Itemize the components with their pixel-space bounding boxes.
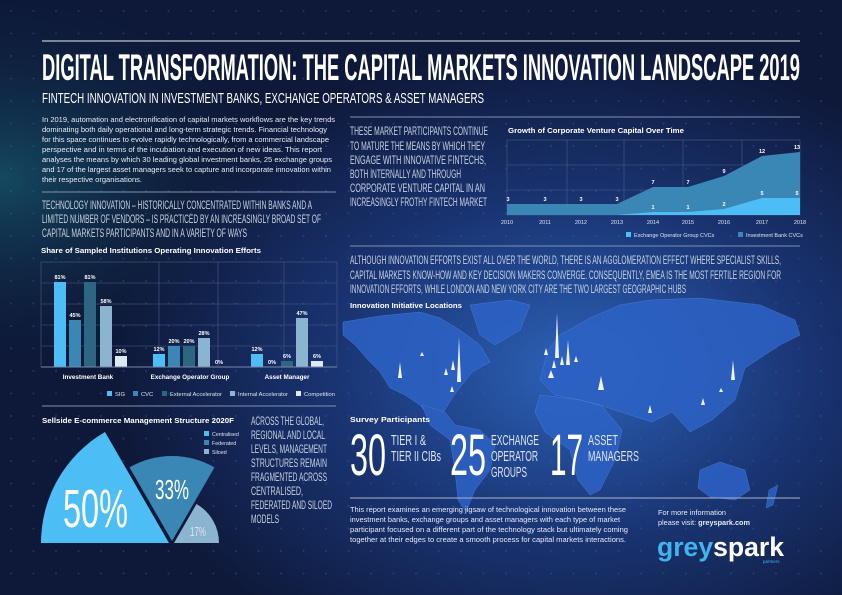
- area chart: growth of corporate venture capital: 2017: [756, 220, 768, 226]
- management structure statement: FRAGMENTED ACROSS: [251, 470, 327, 484]
- closing paragraph: together at their edges to create a smooth process for capital markets interactions.: [350, 535, 626, 544]
- survey participants: TIER I &: [391, 432, 426, 449]
- bar chart: share of sampled institutions: Exchange Operator Group: [151, 374, 230, 381]
- polar chart: sellside e-commerce management structure: 17%: [190, 524, 206, 539]
- survey participants: Survey Participants: [350, 415, 430, 424]
- market participants statement: THESE MARKET PARTICIPANTS CONTINUE: [350, 124, 488, 138]
- survey participants: [350, 415, 639, 488]
- intro paragraph: dominating both daily operational and long-term strategic trends. Financial technology: [42, 125, 327, 134]
- intro paragraph: analyses the means by which 30 leading global investment banks, 25 exchange groups: [42, 155, 332, 164]
- area chart: growth of corporate venture capital: 2010: [501, 220, 513, 226]
- polar chart: sellside e-commerce management structure: 50%: [63, 479, 128, 539]
- bar chart: share of sampled institutions: SIG: [115, 392, 125, 398]
- area chart: growth of corporate venture capital: 7: [651, 180, 655, 186]
- bar chart: share of sampled institutions: Internal Accelerator: [238, 392, 288, 398]
- bar chart: share of sampled institutions: Asset Manager: [265, 374, 310, 381]
- bar chart: share of sampled institutions: Investment Bank: [63, 374, 114, 381]
- area chart: growth of corporate venture capital: 3: [506, 197, 510, 203]
- intro paragraph: and 17 of the largest asset managers seek to capture and incorporate innovation within: [42, 165, 331, 174]
- market participants statement: CORPORATE VENTURE CAPITAL IN AN: [350, 181, 485, 195]
- bar chart: share of sampled institutions: 81%: [54, 275, 66, 281]
- closing paragraph: This report examines an emerging jigsaw of technological innovation between these: [350, 505, 626, 514]
- management structure statement: STRUCTURES REMAIN: [251, 456, 327, 470]
- intro paragraph: their respective organisations.: [42, 175, 142, 184]
- area chart: growth of corporate venture capital: 2016: [718, 220, 730, 226]
- area chart: growth of corporate venture capital: 3: [615, 197, 619, 203]
- market participants statement: [350, 124, 488, 209]
- area chart: growth of corporate venture capital: Investment Bank CVCs: [746, 233, 803, 239]
- polar chart: sellside e-commerce management structure: 33%: [155, 474, 189, 505]
- area chart: growth of corporate venture capital: 2: [722, 202, 726, 208]
- map title: Innovation Initiative Locations: [350, 301, 462, 310]
- polar chart: sellside e-commerce management structure: [41, 416, 239, 543]
- area chart: growth of corporate venture capital: 13: [794, 145, 800, 151]
- bar chart: share of sampled institutions: Share of Sampled Institutions Operating Innovation Efforts: [41, 246, 261, 255]
- intro paragraph: for this space continues to evolve rapidly technologically, from a commercial landscape: [42, 135, 329, 144]
- area chart: growth of corporate venture capital: 1: [686, 205, 690, 211]
- technology innovation statement: [42, 198, 321, 240]
- area chart: growth of corporate venture capital: 2018: [794, 220, 806, 226]
- market participants statement: ENGAGE WITH INNOVATIVE FINTECHS,: [350, 153, 486, 167]
- survey participants: MANAGERS: [588, 448, 639, 465]
- area chart: growth of corporate venture capital: 5: [795, 191, 799, 197]
- bar chart: share of sampled institutions: 6%: [283, 354, 291, 360]
- bar chart: share of sampled institutions: 45%: [69, 313, 81, 319]
- bar chart: share of sampled institutions: 10%: [115, 349, 127, 355]
- intro paragraph: In 2019, automation and electronification of capital markets workflows are the key trends: [42, 115, 335, 124]
- bar chart: share of sampled institutions: 0%: [268, 360, 276, 366]
- logo: greyspark partners: partners: [763, 559, 780, 564]
- bar chart: share of sampled institutions: CVC: [141, 392, 153, 398]
- survey participants: 25: [450, 423, 486, 488]
- area chart: growth of corporate venture capital: Growth of Corporate Venture Capital Over Time: [508, 126, 684, 135]
- technology innovation statement: CAPITAL MARKETS PARTICIPANTS AND IN A VARIETY OF WAYS: [42, 226, 247, 240]
- management structure statement: [251, 414, 332, 526]
- bar chart: share of sampled institutions: 47%: [296, 311, 308, 317]
- management structure statement: REGIONAL AND LOCAL: [251, 428, 325, 442]
- management structure statement: FEDERATED AND SILOED: [251, 498, 332, 512]
- bar chart: share of sampled institutions: 20%: [168, 339, 180, 345]
- closing paragraph: investment banks, exchange groups and asset managers with each type of market: [350, 515, 620, 524]
- market participants statement: BOTH INTERNALLY AND THROUGH: [350, 167, 461, 181]
- contact info: [658, 508, 750, 527]
- bar chart: share of sampled institutions: [41, 246, 337, 398]
- survey participants: 17: [550, 423, 583, 488]
- technology innovation statement: TECHNOLOGY INNOVATION – HISTORICALLY CONCENTRATED WITHIN BANKS AND A: [42, 198, 312, 212]
- bar chart: share of sampled institutions: 58%: [100, 299, 112, 305]
- bar chart: share of sampled institutions: 20%: [183, 339, 195, 345]
- bar chart: share of sampled institutions: 12%: [251, 347, 263, 353]
- area chart: growth of corporate venture capital: 9: [722, 169, 726, 175]
- survey participants: EXCHANGE: [491, 432, 539, 449]
- technology innovation statement: LIMITED NUMBER OF VENDORS – IS PRACTICED BY AN INCREASINGLY BROAD SET OF: [42, 212, 321, 226]
- closing paragraph: participant focused on a different part of the technology stack but ultimately coming: [350, 525, 628, 534]
- bar chart: share of sampled institutions: 0%: [215, 360, 223, 366]
- contact info: For more information: [658, 508, 726, 517]
- area chart: growth of corporate venture capital: Exchange Operator Group CVCs: [634, 233, 715, 239]
- survey participants: TIER II CIBs: [391, 448, 441, 465]
- area chart: growth of corporate venture capital: [501, 126, 806, 239]
- intro paragraph: [42, 115, 335, 184]
- area chart: growth of corporate venture capital: 3: [543, 197, 547, 203]
- management structure statement: CENTRALISED,: [251, 484, 303, 498]
- polar chart: sellside e-commerce management structure: Sellside E-commerce Management Structure 2020F: [42, 416, 234, 425]
- contact info: please visit: greyspark.com: [658, 518, 750, 527]
- area chart: growth of corporate venture capital: 2011: [539, 220, 551, 226]
- logo: greyspark partners: greyspark: [657, 532, 785, 562]
- map spikes: [398, 313, 735, 413]
- area chart: growth of corporate venture capital: 7: [686, 180, 690, 186]
- bar chart: share of sampled institutions: 6%: [313, 354, 321, 360]
- polar chart: sellside e-commerce management structure: Federated: [212, 441, 236, 447]
- area chart: growth of corporate venture capital: 5: [760, 191, 764, 197]
- management structure statement: ACROSS THE GLOBAL,: [251, 414, 324, 428]
- area chart: growth of corporate venture capital: 1: [651, 205, 655, 211]
- area chart: growth of corporate venture capital: 2014: [647, 220, 659, 226]
- closing paragraph: [350, 505, 628, 544]
- intro paragraph: perspective and in terms of the incubation and execution of new ideas. This report: [42, 145, 322, 154]
- survey participants: OPERATOR: [491, 448, 538, 465]
- area chart: growth of corporate venture capital: 2013: [611, 220, 623, 226]
- polar chart: sellside e-commerce management structure: Siloed: [212, 450, 227, 456]
- management structure statement: MODELS: [251, 512, 279, 526]
- survey participants: ASSET: [588, 432, 618, 449]
- bar chart: share of sampled institutions: 28%: [198, 331, 210, 337]
- polar chart: sellside e-commerce management structure: Centralised: [212, 432, 239, 438]
- market participants statement: TO MATURE THE MEANS BY WHICH THEY: [350, 139, 485, 153]
- world map: [343, 298, 800, 512]
- bar chart: share of sampled institutions: External Accelerator: [170, 392, 222, 398]
- management structure statement: LEVELS, MANAGEMENT: [251, 442, 327, 456]
- agglomeration statement: [350, 253, 781, 296]
- top rule: [42, 40, 800, 42]
- survey participants: 30: [350, 423, 386, 488]
- area chart: growth of corporate venture capital: 3: [579, 197, 583, 203]
- bar chart: share of sampled institutions: 12%: [153, 347, 165, 353]
- area chart: growth of corporate venture capital: 2012: [575, 220, 587, 226]
- area chart: growth of corporate venture capital: 12: [759, 149, 765, 155]
- bar chart: share of sampled institutions: 81%: [84, 275, 96, 281]
- area chart: growth of corporate venture capital: 2015: [682, 220, 694, 226]
- subtitle: FINTECH INNOVATION IN INVESTMENT BANKS, EXCHANGE OPERATORS & ASSET MANAGERS: [42, 90, 484, 107]
- market participants statement: INCREASINGLY FROTHY FINTECH MARKET: [350, 195, 487, 209]
- bar chart: share of sampled institutions: Competition: [304, 392, 335, 398]
- survey participants: GROUPS: [491, 464, 527, 481]
